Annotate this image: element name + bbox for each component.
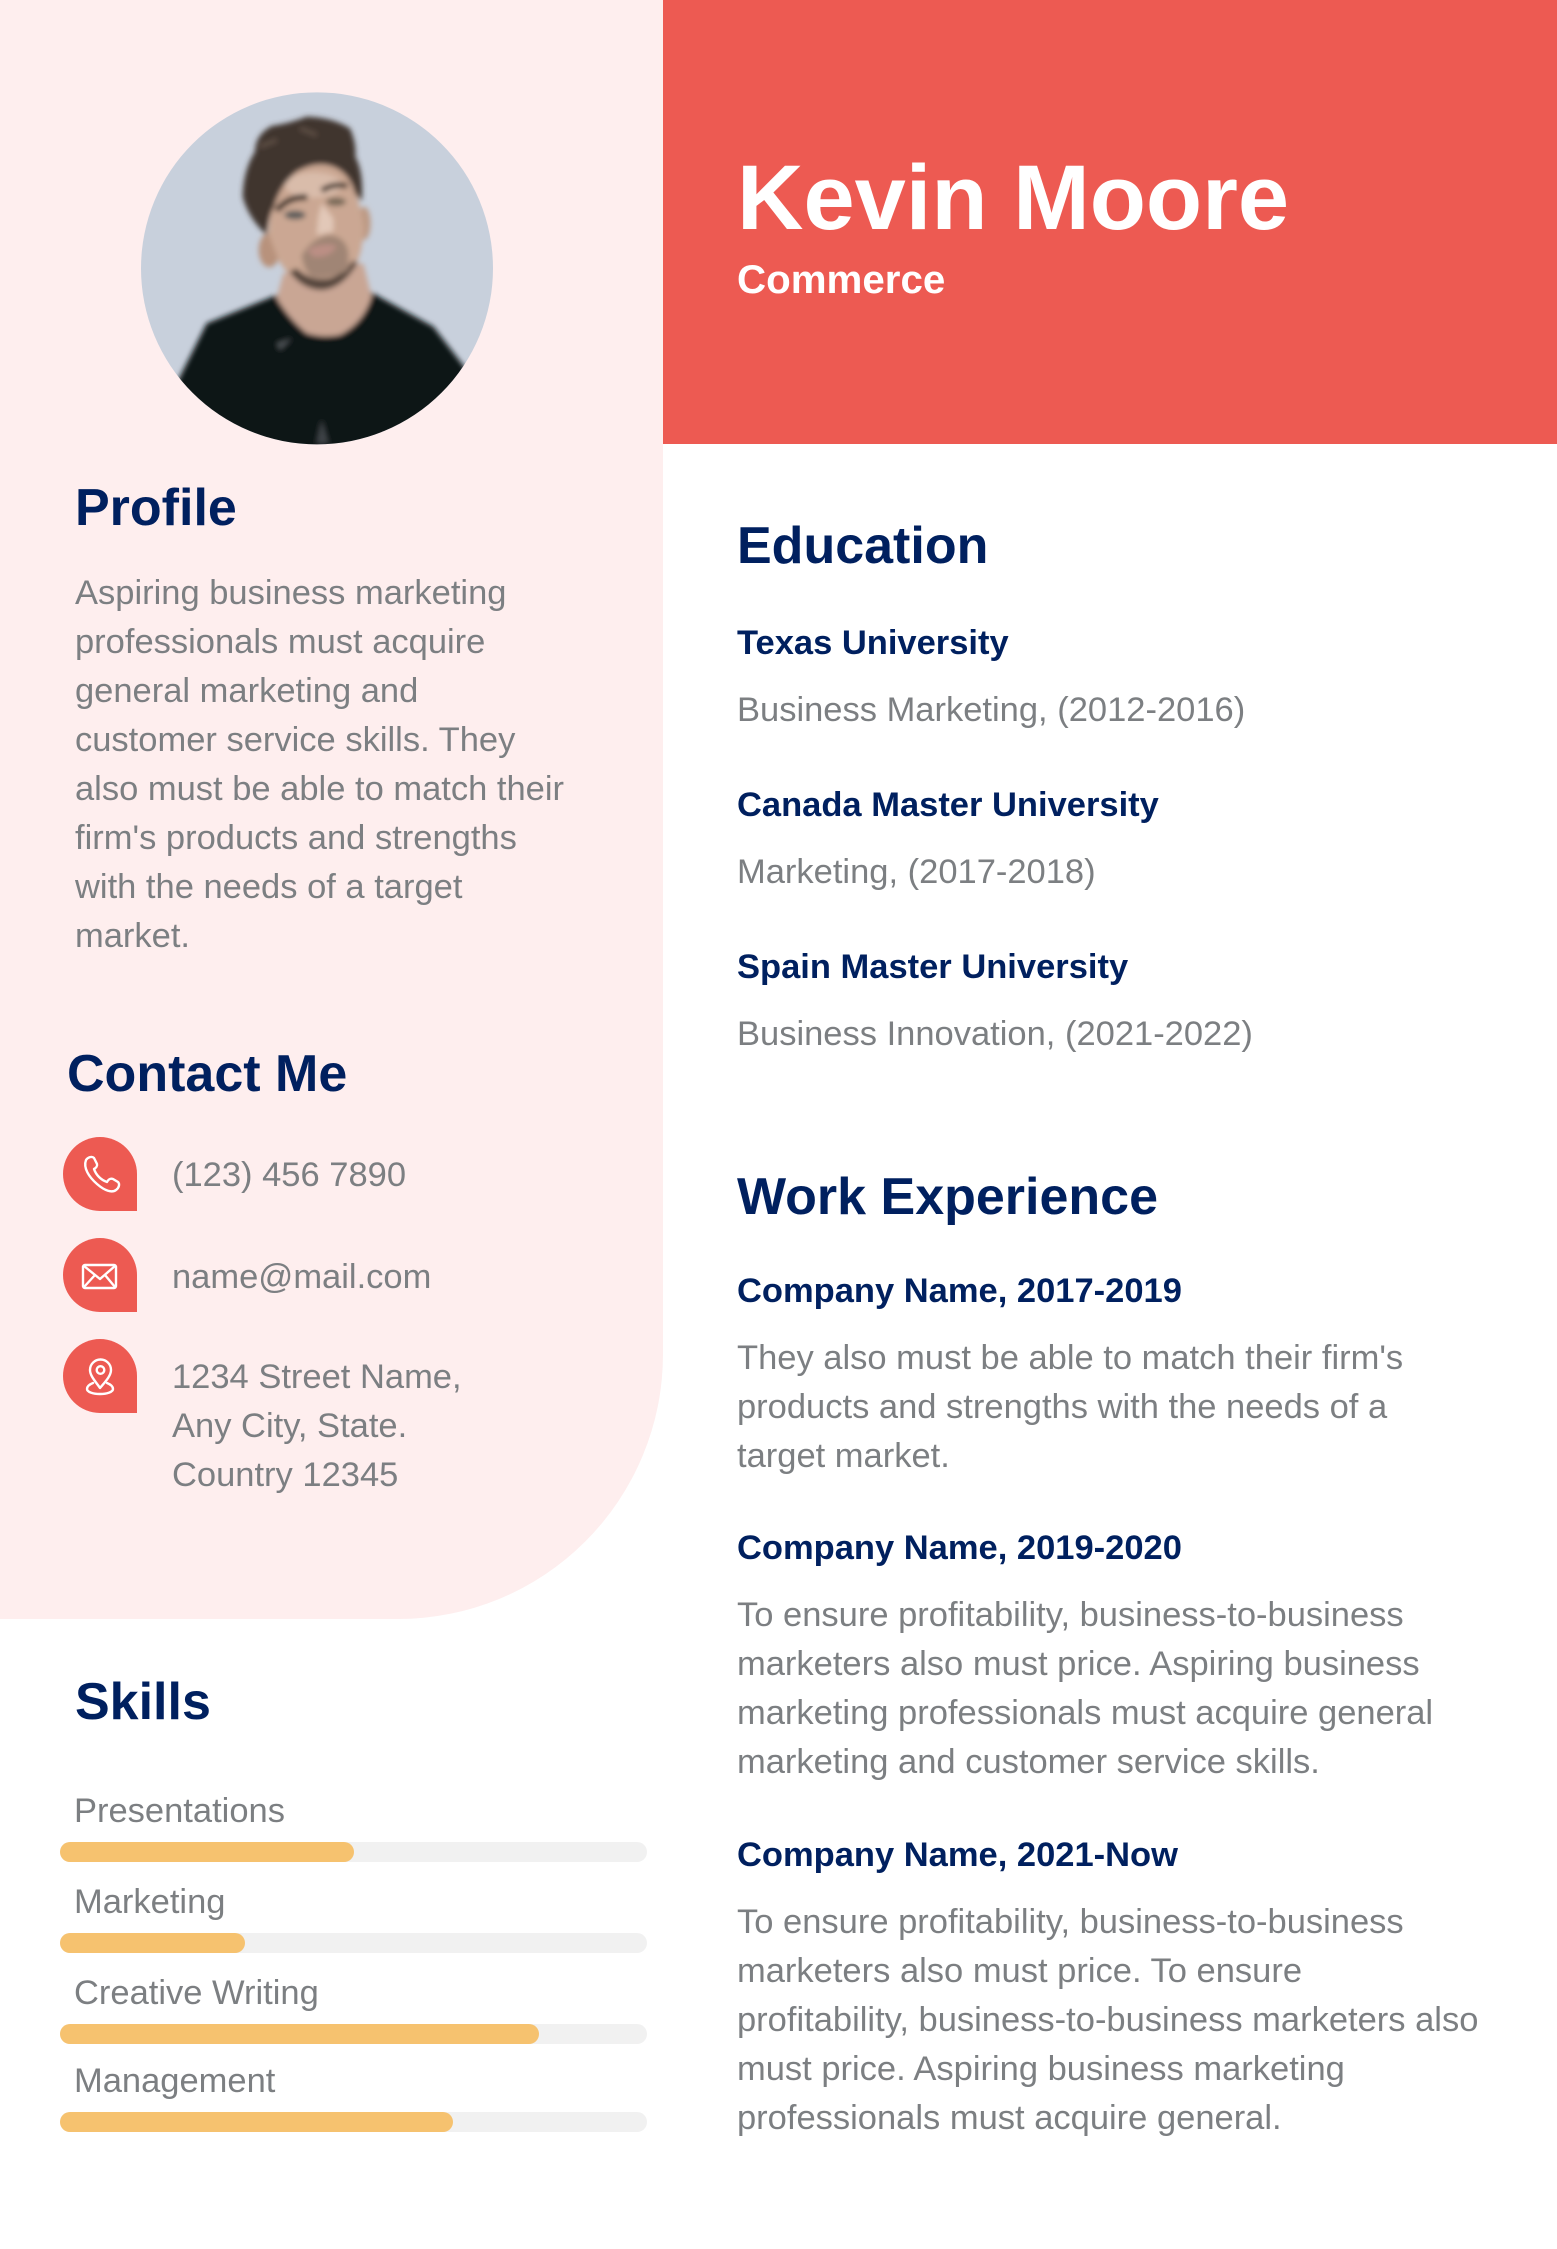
skill label: creative writing: Creative Writing (74, 1974, 319, 2012)
job text: 2021-now: To ensure profitability, business-to-business (737, 1903, 1404, 1941)
job title: 2017-2019: Company Name, 2017-2019 (737, 1272, 1182, 1310)
skill label: management: Management (74, 2062, 275, 2100)
job text: 2019-2020: marketing and customer service skills. (737, 1743, 1320, 1781)
skill bar: presentations (60, 1842, 647, 1862)
text block: profile: professionals must acquire (75, 623, 485, 661)
job text: 2019-2020: To ensure profitability, business-to-business (737, 1596, 1404, 1634)
text: email: name@mail.com (172, 1258, 431, 1296)
heading: education: Education (737, 517, 988, 575)
heading: contact me: Contact Me (67, 1045, 347, 1103)
panel: header banner (663, 0, 1557, 444)
skill bar: marketing (60, 1933, 647, 1953)
panel: left sidebar background (0, 0, 663, 1619)
text block: profile: with the needs of a target (75, 868, 462, 906)
job text: 2019-2020 (737, 1596, 1433, 1781)
job title: 2021-now: Company Name, 2021-Now (737, 1836, 1178, 1874)
heading: skills: Skills (75, 1673, 211, 1731)
job text: 2021-now: must price. Aspiring business marketing (737, 2050, 1345, 2088)
job text: 2021-now: marketers also must price. To ensure (737, 1952, 1302, 1990)
skill label: presentations: Presentations (74, 1792, 285, 1830)
text: phone number: (123) 456 7890 (172, 1156, 406, 1194)
job text: 2019-2020: marketing professionals must acquire general (737, 1694, 1433, 1732)
icon: location pin (63, 1339, 137, 1413)
job title: 2019-2020: Company Name, 2019-2020 (737, 1529, 1182, 1567)
education detail: texas: Business Marketing, (2012-2016) (737, 691, 1245, 729)
text block: profile: general marketing and (75, 672, 418, 710)
text: address: Country 12345 (172, 1456, 398, 1494)
text: address: 1234 Street Name, (172, 1358, 462, 1396)
icon: mail (63, 1238, 137, 1312)
job text: 2017-2019: target market. (737, 1437, 950, 1475)
skill bar: creative writing (60, 2024, 647, 2044)
education detail: spain: Business Innovation, (2021-2022) (737, 1015, 1253, 1053)
education entry: texas: Texas University (737, 624, 1009, 662)
text block: profile: Aspiring business marketing (75, 574, 506, 612)
text: address (172, 1358, 462, 1494)
job text: 2017-2019: products and strengths with the needs of a (737, 1388, 1387, 1426)
title: name: Kevin Moore (737, 147, 1289, 249)
icon: phone (63, 1137, 137, 1211)
heading: profile: Profile (75, 479, 237, 537)
heading: work experience: Work Experience (737, 1168, 1158, 1226)
text block: profile: customer service skills. They (75, 721, 515, 759)
job text: 2017-2019: They also must be able to match their firm's (737, 1339, 1403, 1377)
text block: profile (75, 574, 564, 955)
text block: profile: firm's products and strengths (75, 819, 517, 857)
text block: profile: market. (75, 917, 190, 955)
text: address: Any City, State. (172, 1407, 407, 1445)
skill label: marketing: Marketing (74, 1883, 225, 1921)
job text: 2021-now (737, 1903, 1478, 2137)
subtitle: field: Commerce (737, 257, 945, 302)
job text: 2021-now: professionals must acquire general. (737, 2099, 1282, 2137)
skill bar: management (60, 2112, 647, 2132)
icon: profile photo (141, 92, 493, 444)
education detail: canada: Marketing, (2017-2018) (737, 853, 1096, 891)
job text: 2021-now: profitability, business-to-business marketers also (737, 2001, 1478, 2039)
text block: profile: also must be able to match their (75, 770, 564, 808)
job text: 2019-2020: marketers also must price. Aspiring business (737, 1645, 1420, 1683)
education entry: spain: Spain Master University (737, 948, 1128, 986)
job text: 2017-2019 (737, 1339, 1403, 1475)
education entry: canada: Canada Master University (737, 786, 1159, 824)
